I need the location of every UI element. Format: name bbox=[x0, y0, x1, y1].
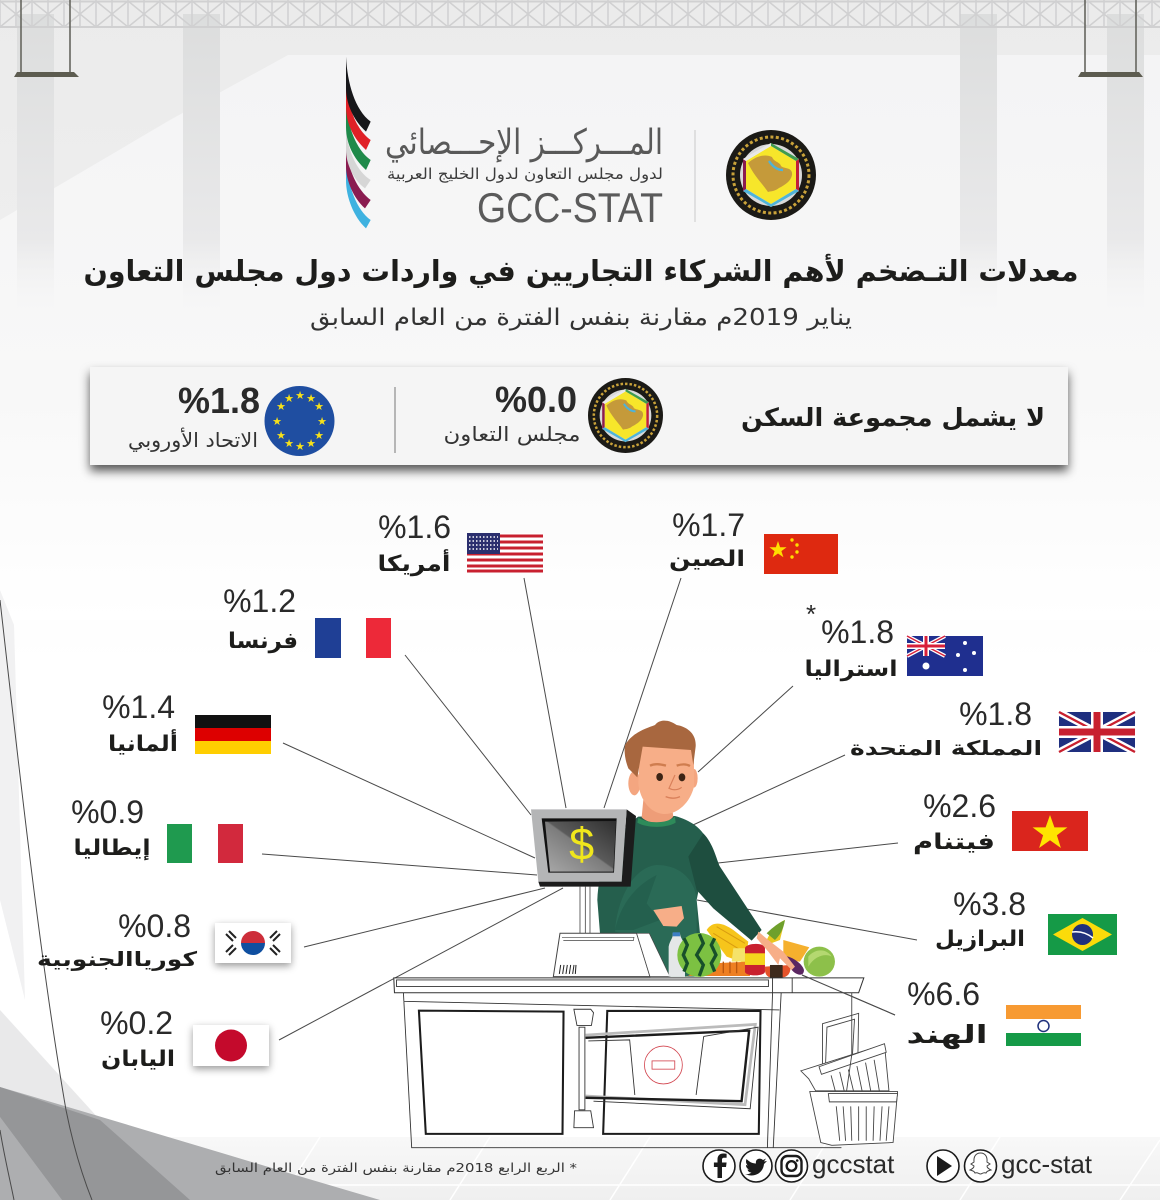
icon: EU flag: ★ bbox=[306, 437, 316, 450]
name: الهند bbox=[906, 1020, 988, 1050]
icon: EU flag: ★ bbox=[306, 392, 316, 405]
connector lines bbox=[262, 578, 917, 1040]
icon: GCC emblem small bbox=[588, 378, 663, 453]
Italy bbox=[71, 794, 243, 863]
flag: UK bbox=[1059, 712, 1135, 752]
flag: India bbox=[1006, 1005, 1081, 1046]
Vietnam bbox=[913, 788, 1088, 855]
icon: EU flag: ★ bbox=[284, 392, 294, 405]
left panel bbox=[419, 1011, 564, 1134]
flag: Japan bbox=[193, 1025, 269, 1066]
value: %0.2 bbox=[100, 1005, 173, 1041]
gate bbox=[574, 1009, 758, 1128]
value: %3.8 bbox=[953, 886, 1026, 922]
Brazil bbox=[935, 886, 1117, 955]
counter column bbox=[767, 993, 781, 1148]
dollar sign: $ bbox=[569, 818, 594, 869]
collar bbox=[637, 817, 676, 827]
subtitle: يناير 2019م مقارنة بنفس الفترة من العام السابق bbox=[310, 305, 852, 331]
value: %1.2 bbox=[223, 583, 296, 619]
icon: facebook bbox=[703, 1150, 735, 1182]
groceries bbox=[669, 920, 835, 978]
panel: excluding population bbox=[90, 367, 1068, 465]
name: الصين bbox=[669, 547, 745, 572]
neck bbox=[642, 800, 673, 823]
value: %1.8 bbox=[821, 614, 894, 650]
title: معدلات التـضخم لأهم الشركاء التجاريين في واردات دول مجلس التعاون bbox=[84, 253, 1078, 288]
icon: EU flag: ★ bbox=[314, 429, 324, 442]
name: فرنسا bbox=[228, 629, 298, 654]
value: %0.9 bbox=[71, 794, 144, 830]
flag: Italy bbox=[167, 824, 243, 863]
France bbox=[223, 583, 391, 658]
icon: youtube play bbox=[927, 1150, 959, 1182]
India bbox=[906, 976, 1081, 1050]
counter body bbox=[403, 993, 841, 1148]
icon: EU flag: ★ bbox=[272, 415, 282, 428]
name: ألمانيا bbox=[108, 728, 178, 757]
icon: EU flag: ★ bbox=[295, 440, 305, 453]
icon: EU flag: ★ bbox=[314, 400, 324, 413]
China bbox=[669, 507, 838, 574]
bottom-left decorative shapes bbox=[0, 600, 380, 1200]
social icons: gccstat bbox=[703, 1149, 895, 1182]
icon: instagram bbox=[776, 1150, 808, 1182]
icon: EU flag: ★ bbox=[295, 389, 305, 402]
sweater body bbox=[597, 816, 708, 977]
handle gcc-stat: gcc-stat bbox=[1001, 1149, 1093, 1179]
scale bbox=[553, 933, 650, 977]
pole bbox=[580, 887, 590, 933]
Australia bbox=[804, 599, 983, 682]
counter top bbox=[394, 978, 864, 993]
icon: EU flag bbox=[264, 386, 334, 456]
cashier illustration bbox=[531, 721, 835, 978]
flag: USA bbox=[467, 533, 543, 572]
USA bbox=[378, 509, 543, 577]
value: %6.6 bbox=[907, 976, 980, 1012]
ears bbox=[628, 771, 640, 795]
icon: GCC emblem bbox=[726, 130, 816, 220]
value: %0.8 bbox=[118, 908, 191, 944]
EU value: %1.8 bbox=[178, 380, 260, 421]
name: المملكة المتحدة bbox=[850, 736, 1042, 760]
social icons: gcc-stat bbox=[927, 1149, 1093, 1182]
face bbox=[638, 742, 694, 814]
footnote: * الربع الرابع 2018م مقارنة بنفس الفترة من العام السابق bbox=[215, 1160, 577, 1176]
icon: EU flag: ★ bbox=[317, 415, 327, 428]
icon: EU flag: ★ bbox=[276, 429, 286, 442]
GCC label: مجلس التعاون bbox=[444, 422, 580, 446]
lamp left bbox=[14, 0, 79, 77]
baskets bbox=[801, 993, 898, 1145]
value: %1.8 bbox=[959, 696, 1032, 732]
hair bbox=[625, 721, 696, 777]
name: كورياالجنوبية bbox=[37, 947, 197, 971]
counter bbox=[394, 978, 898, 1148]
monitor bbox=[538, 809, 636, 887]
icon: snapchat bbox=[964, 1150, 996, 1182]
name: البرازيل bbox=[935, 927, 1025, 952]
name: أمريكا bbox=[378, 548, 450, 577]
India line over counter bbox=[802, 975, 895, 1015]
asterisk: * bbox=[806, 599, 816, 629]
near arm bbox=[688, 833, 762, 941]
value: %1.7 bbox=[672, 507, 745, 543]
value: %2.6 bbox=[923, 788, 996, 824]
logo GCC-STAT wordmark: GCC-STAT bbox=[477, 184, 663, 231]
hand on belly bbox=[653, 906, 684, 927]
value: %1.4 bbox=[102, 689, 175, 725]
lamp right bbox=[1078, 0, 1143, 77]
icon: EU flag: ★ bbox=[276, 400, 286, 413]
value: %1.6 bbox=[378, 509, 451, 545]
logo: GCC-STAT bbox=[346, 57, 663, 231]
logo Arabic name: المـــركـــز الإحـــصائي bbox=[385, 123, 663, 163]
flag: China bbox=[764, 534, 838, 574]
Germany bbox=[102, 689, 271, 757]
flag: Brazil bbox=[1048, 914, 1117, 955]
brows, eyes, nose, mouth bbox=[650, 764, 690, 766]
GCC value: %0.0 bbox=[495, 379, 577, 420]
icon: twitter bbox=[740, 1150, 772, 1182]
flag: Vietnam bbox=[1012, 811, 1088, 851]
right panel bbox=[603, 1011, 761, 1134]
name: فيتنام bbox=[913, 830, 995, 855]
handle gccstat: gccstat bbox=[812, 1149, 895, 1179]
flag: France bbox=[315, 618, 391, 658]
South Korea bbox=[37, 908, 291, 971]
icon: EU flag: ★ bbox=[284, 437, 294, 450]
United Kingdom bbox=[850, 696, 1135, 760]
panel heading: لا يشمل مجموعة السكن bbox=[741, 403, 1045, 433]
flag: Germany bbox=[195, 715, 271, 754]
flag: Australia bbox=[907, 636, 983, 676]
Japan bbox=[100, 1005, 269, 1072]
name: اليابان bbox=[101, 1047, 175, 1072]
flag: South Korea bbox=[215, 923, 291, 963]
logo Arabic subtitle: لدول مجلس التعاون لدول الخليج العربية bbox=[387, 165, 663, 183]
logo ribbon bbox=[346, 57, 371, 228]
name: استراليا bbox=[804, 657, 898, 682]
EU label: الاتحاد الأوروبي bbox=[128, 428, 258, 453]
name: إيطاليا bbox=[74, 836, 150, 861]
